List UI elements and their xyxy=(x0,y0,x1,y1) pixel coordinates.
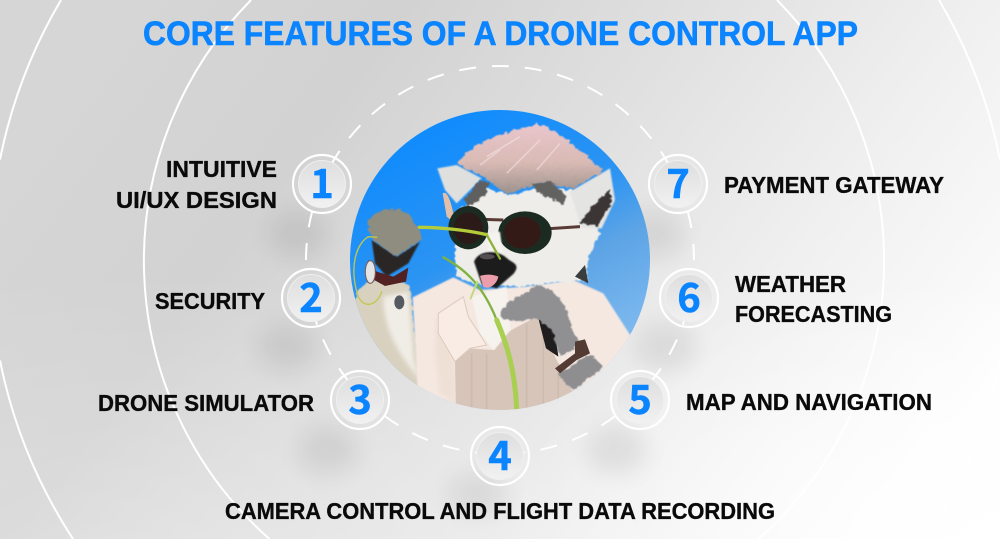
right hand fur xyxy=(500,285,582,357)
number 3: 3 xyxy=(348,368,372,426)
face xyxy=(454,187,601,287)
label 6: WEATHER xyxy=(735,271,846,297)
grass blades xyxy=(354,227,517,408)
number 7 xyxy=(649,152,707,213)
label 1 xyxy=(116,156,277,213)
arm mark xyxy=(394,295,404,309)
label 1: UI/UX DESIGN xyxy=(116,187,277,213)
label 5: MAP AND NAVIGATION xyxy=(686,389,932,415)
sky xyxy=(350,110,650,410)
white chest xyxy=(472,287,511,350)
label 6: FORECASTING xyxy=(735,301,892,327)
left palm xyxy=(372,240,420,277)
right watch xyxy=(555,339,590,373)
number 7: 7 xyxy=(666,152,690,210)
hair xyxy=(456,124,603,194)
left watch xyxy=(365,260,408,286)
left arm highlight xyxy=(383,292,420,380)
number 6 xyxy=(660,266,718,327)
left hand fur xyxy=(367,209,423,257)
vest xyxy=(455,317,573,413)
hair streaks xyxy=(480,137,560,173)
label 6 xyxy=(735,271,892,327)
shirt xyxy=(413,277,633,417)
label 1: INTUITIVE xyxy=(166,156,277,182)
right ear xyxy=(570,168,615,228)
lower right arm xyxy=(558,354,604,391)
goggles xyxy=(448,206,580,254)
collar xyxy=(438,297,487,362)
right arm dark patch xyxy=(538,318,558,357)
shirt shadow folds xyxy=(436,331,454,400)
left ear xyxy=(437,165,482,203)
tongue xyxy=(480,275,498,288)
title: CORE FEATURES OF A DRONE CONTROL APP xyxy=(143,15,858,53)
number 2 xyxy=(282,266,340,327)
number 5 xyxy=(611,368,669,429)
number 4 xyxy=(471,424,529,485)
number 5: 5 xyxy=(628,368,652,426)
brow patches xyxy=(463,180,490,207)
number 1 xyxy=(293,152,351,213)
nose bridge xyxy=(486,230,503,244)
muzzle xyxy=(474,252,516,288)
bubble shadows xyxy=(258,210,696,514)
number 4: 4 xyxy=(488,424,512,482)
dashed ring connecting the numbers xyxy=(306,66,694,454)
vest stripes xyxy=(472,323,558,412)
nose highlight xyxy=(480,254,495,259)
left arm xyxy=(353,280,422,387)
neck shadow xyxy=(575,265,588,283)
number 2: 2 xyxy=(299,266,323,324)
number 6: 6 xyxy=(677,266,701,324)
label 2: SECURITY xyxy=(155,288,265,314)
label 7: PAYMENT GATEWAY xyxy=(724,172,944,198)
number 3 xyxy=(331,368,389,429)
number 1: 1 xyxy=(310,152,334,210)
photo: lemur with goggles in blue circle xyxy=(350,110,650,417)
label 4: CAMERA CONTROL AND FLIGHT DATA RECORDING xyxy=(225,498,775,524)
label 3: DRONE SIMULATOR xyxy=(98,390,314,416)
